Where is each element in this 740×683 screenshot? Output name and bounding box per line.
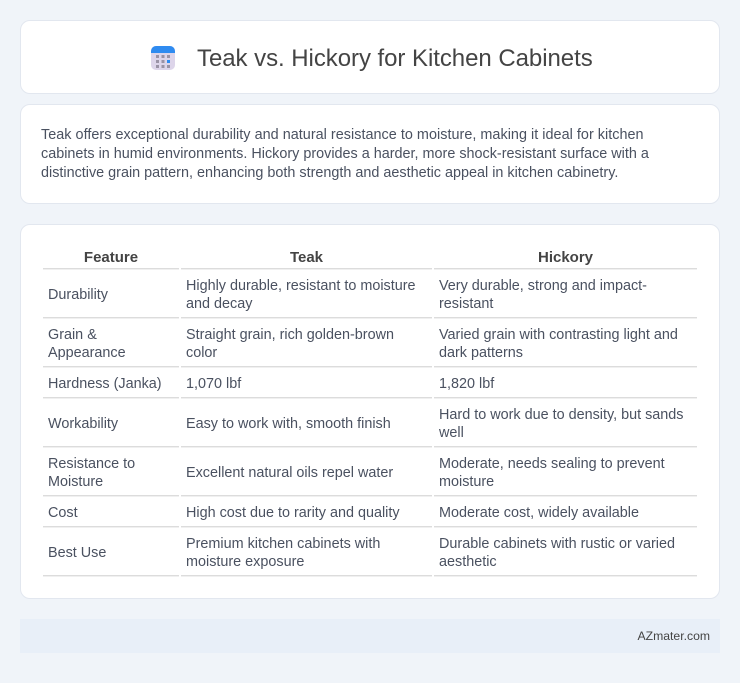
row: Best Use: Premium kitchen cabinets with <box>186 536 380 552</box>
row: Grain & Appearance: Varied grain with contrasting light and <box>439 327 678 343</box>
row: Workability: Easy to work with, smooth finish <box>186 416 391 432</box>
row: Grain & Appearance <box>48 327 678 361</box>
header: Teak: Teak <box>290 249 323 266</box>
row: Cost <box>48 505 639 521</box>
title: Teak vs. Hickory for Kitchen Cabinets <box>197 45 593 72</box>
row: Durability: Highly durable, resistant to moisture <box>186 278 416 294</box>
row: Durability: Durability <box>48 287 108 303</box>
intro paragraph: Teak offers exceptional durability and natural resistance to moisture, making it ideal for kitchen <box>41 127 644 143</box>
row: Cost: High cost due to rarity and quality <box>186 505 400 521</box>
header: Feature: Feature <box>84 249 138 266</box>
intro text card <box>20 104 720 204</box>
header: Hickory: Hickory <box>538 249 593 266</box>
row: Durability: Very durable, strong and impact- <box>439 278 647 294</box>
row: Durability <box>48 278 647 312</box>
row: Workability <box>48 407 684 441</box>
row: Resistance to Moisture: Moisture <box>48 474 103 490</box>
footer bar <box>20 619 720 653</box>
comparison table card <box>20 224 720 599</box>
row: Workability: well <box>439 425 464 441</box>
row: Best Use: moisture exposure <box>186 554 304 570</box>
row: Best Use: aesthetic <box>439 554 497 570</box>
icon: calendar <box>151 46 175 70</box>
row: Hardness: 1,070 lbf <box>186 376 241 392</box>
row: Durability: and decay <box>186 296 252 312</box>
row: Best Use: Best Use <box>48 545 106 561</box>
comparison table <box>43 249 697 577</box>
row: Cost: Moderate cost, widely available <box>439 505 639 521</box>
footer credit: AZmater.com <box>638 629 710 643</box>
row: Resistance to Moisture <box>48 456 665 490</box>
row: Hardness: Hardness (Janka) <box>48 376 162 392</box>
row: Hardness <box>48 376 494 392</box>
intro paragraph <box>41 127 649 181</box>
row: Workability: Hard to work due to density, but sands <box>439 407 684 423</box>
row: Resistance to Moisture: moisture <box>439 474 494 490</box>
row: Grain & Appearance: color <box>186 345 217 361</box>
intro paragraph: distinctive grain pattern, enhancing both strength and aesthetic appeal in kitchen cabinetry. <box>41 165 618 181</box>
intro paragraph: cabinets in humid environments. Hickory provides a harder, more shock-resistant surface with a <box>41 146 649 162</box>
row: Hardness: 1,820 lbf <box>439 376 494 392</box>
row: Best Use: Durable cabinets with rustic or varied <box>439 536 675 552</box>
row: Cost: Cost <box>48 505 78 521</box>
row: Resistance to Moisture: Resistance to <box>48 456 135 472</box>
row: Durability: resistant <box>439 296 493 312</box>
row: Workability: Workability <box>48 416 118 432</box>
row: Grain & Appearance: Straight grain, rich golden-brown <box>186 327 394 343</box>
title card <box>20 20 720 94</box>
row: Resistance to Moisture: Moderate, needs sealing to prevent <box>439 456 665 472</box>
row: Grain & Appearance: Appearance <box>48 345 126 361</box>
row: Grain & Appearance: dark patterns <box>439 345 523 361</box>
row: Resistance to Moisture: Excellent natural oils repel water <box>186 465 393 481</box>
row: Grain & Appearance: Grain & <box>48 327 97 343</box>
row: Best Use <box>48 536 675 570</box>
